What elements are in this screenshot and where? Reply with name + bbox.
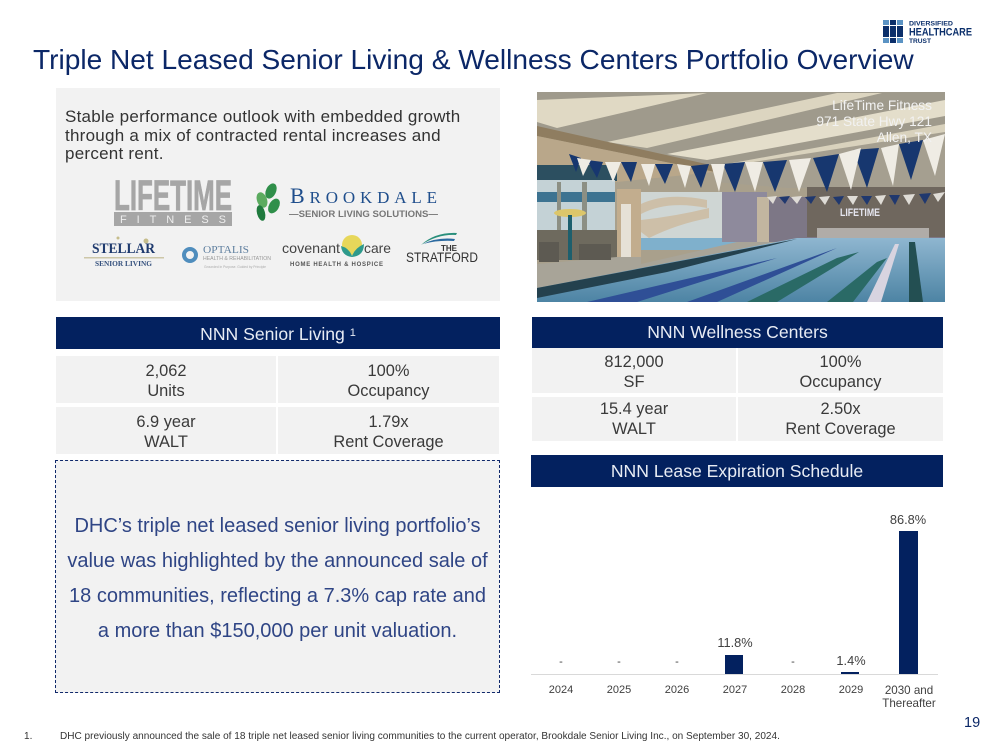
photo caption: 971 State Hwy 121	[816, 114, 932, 129]
stat: occupancy	[278, 356, 499, 403]
stat: occupancy: 100%	[368, 362, 409, 380]
photo: LifeTime Fitness pool with caption	[537, 92, 945, 302]
intro text	[65, 107, 460, 163]
value labels: -	[617, 656, 621, 668]
stat: WALT: 15.4 year	[600, 400, 668, 418]
logo: Brookdale: —SENIOR LIVING SOLUTIONS—	[289, 209, 438, 219]
value labels: -	[791, 656, 795, 668]
heading: lease expiration	[531, 455, 943, 487]
stat: rent coverage: Rent Coverage	[785, 420, 896, 438]
stat: occupancy	[738, 348, 943, 393]
bar chart: lease expiration schedule	[531, 512, 938, 710]
panel: intro and tenant logos	[56, 88, 500, 301]
stat: rent coverage	[278, 407, 499, 454]
photo caption: Allen, TX	[877, 130, 932, 145]
footnote: DHC previously announced the sale of 18 triple net leased senior living communities to the current operator, Brookdale Senior Living Inc., on September 30, 2024.	[60, 731, 780, 742]
axis labels	[549, 684, 936, 710]
logo: Lifetime Fitness: FITNESS	[120, 214, 226, 226]
stat: square feet	[532, 348, 736, 393]
value labels	[559, 512, 926, 668]
photo caption	[816, 98, 932, 145]
stat: WALT	[532, 397, 736, 441]
heading	[56, 317, 500, 349]
stat: square feet: 812,000	[604, 353, 664, 371]
logo: Brookdale	[256, 183, 438, 221]
stat: rent coverage: 2.50x	[820, 400, 861, 418]
title: Triple Net Leased Senior Living & Wellness Centers Portfolio Overview	[33, 44, 914, 75]
page number: 19	[964, 715, 980, 731]
heading: NNN Wellness Centers	[647, 322, 828, 342]
intro text: Stable performance outlook with embedded growth	[65, 107, 460, 126]
photo: LifeTime Fitness pool with caption: LIFETIME	[840, 207, 880, 219]
intro text: percent rent.	[65, 144, 164, 163]
logo: Stellar Senior Living: STELLAR	[92, 241, 155, 257]
panel: NNN Wellness Centers table	[532, 317, 943, 441]
logo: Stellar Senior Living	[84, 236, 164, 268]
stat: rent coverage: Rent Coverage	[333, 433, 444, 451]
stat: WALT: WALT	[612, 420, 656, 438]
stat: WALT	[56, 407, 276, 454]
logo: Diversified Healthcare Trust: HEALTHCARE	[909, 26, 972, 38]
callout: sale highlight: 18 communities, reflecting a 7.3% cap rate and	[69, 585, 486, 607]
axis labels: 2026	[665, 684, 689, 696]
panel: NNN Senior Living table	[56, 317, 500, 454]
intro text: through a mix of contracted rental increases and	[65, 126, 441, 144]
callout: sale highlight: DHC’s triple net leased senior living portfolio’s	[74, 515, 481, 537]
callout: sale highlight	[55, 460, 500, 693]
logo: Optalis: OPTALIS	[203, 245, 249, 256]
logo: Diversified Healthcare Trust: TRUST	[909, 38, 931, 45]
logo: Stellar Senior Living: SENIOR LIVING	[95, 259, 152, 268]
bar 2027	[725, 655, 743, 674]
axis labels: 2029	[839, 684, 863, 696]
stat: units	[56, 356, 276, 403]
axis labels: 2030 and	[885, 684, 933, 697]
logo: Diversified Healthcare Trust: DIVERSIFIED	[909, 20, 953, 28]
axis	[531, 674, 938, 675]
heading: NNN Senior Living 1	[200, 324, 356, 344]
value labels: 11.8%	[717, 635, 753, 650]
stat: rent coverage: 1.79x	[368, 413, 409, 431]
axis labels: 2025	[607, 684, 631, 696]
stat: units: 2,062	[145, 362, 187, 380]
logo: Covenant Care: care	[364, 240, 391, 256]
stat: square feet: SF	[624, 373, 644, 391]
bar 2029	[841, 672, 859, 674]
callout: sale highlight: value was highlighted by the announced sale of	[67, 550, 488, 572]
stat: occupancy: 100%	[820, 353, 861, 371]
stat: occupancy: Occupancy	[348, 382, 430, 400]
heading: lease expiration: NNN Lease Expiration Schedule	[611, 461, 863, 481]
stat: rent coverage	[738, 397, 943, 441]
logo: Covenant Care	[282, 235, 391, 268]
logo: Diversified Healthcare Trust	[883, 20, 972, 45]
axis labels: 2024	[549, 684, 573, 696]
stat: WALT: 6.9 year	[136, 413, 196, 431]
stat: WALT: WALT	[144, 433, 188, 451]
value labels: 86.8%	[890, 512, 926, 527]
footnote: 1.	[24, 731, 32, 742]
heading	[532, 317, 943, 348]
axis labels: Thereafter	[882, 697, 936, 710]
value labels: 1.4%	[836, 653, 866, 668]
logo: The Stratford: THE	[441, 244, 458, 253]
callout: sale highlight: a more than $150,000 per unit valuation.	[98, 620, 457, 642]
value labels: -	[675, 656, 679, 668]
stat: units: Units	[147, 382, 185, 400]
logo: Brookdale: B ROOKDALE	[290, 183, 437, 208]
axis labels: 2027	[723, 684, 747, 696]
logo: Covenant Care: HOME HEALTH & HOSPICE	[290, 262, 383, 268]
bar 2030 and thereafter	[899, 531, 918, 674]
logo: Optalis	[182, 245, 271, 269]
logo: The Stratford	[406, 232, 478, 265]
photo caption: LifeTime Fitness	[832, 98, 932, 113]
stat: occupancy: Occupancy	[800, 373, 882, 391]
value labels: -	[559, 656, 563, 668]
logo: Covenant Care: covenant	[282, 240, 340, 256]
axis labels: 2028	[781, 684, 805, 696]
